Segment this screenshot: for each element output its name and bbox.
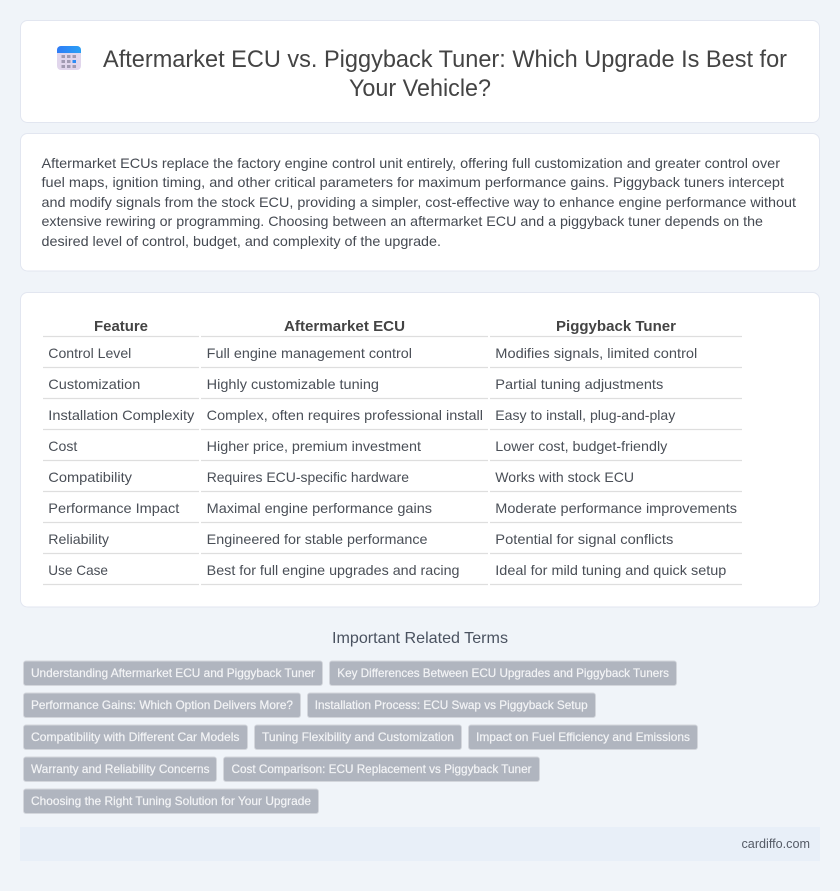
table row: performance impact [48, 500, 737, 516]
tag [468, 725, 698, 750]
icon: calendar grid [57, 46, 81, 70]
tag [224, 757, 540, 782]
table row: reliability: Engineered for stable performance [207, 531, 428, 547]
panel: introduction paragraph [20, 134, 820, 271]
tag: Compatibility with Different Car Models [31, 730, 240, 744]
footer bar [20, 827, 820, 861]
text block: introduction: Aftermarket ECUs replace the factory engine control unit entirely, offering full customization and greater control over [42, 155, 780, 171]
text block: introduction [42, 155, 796, 249]
table row: compatibility: Works with stock ECU [495, 469, 634, 485]
table header row: Piggyback Tuner [556, 318, 676, 335]
table row: customization: Highly customizable tuning [207, 376, 379, 392]
table row: use case: Best for full engine upgrades and racing [207, 562, 460, 578]
table row: reliability: Potential for signal conflicts [495, 531, 673, 547]
table row: cost: Cost [48, 438, 77, 454]
table row: compatibility: Requires ECU-specific hardware [207, 469, 409, 485]
title: Your Vehicle? [349, 75, 491, 102]
table row: compatibility: Compatibility [48, 469, 132, 485]
table row: installation complexity [48, 407, 675, 423]
table row: performance impact: Moderate performance improvements [495, 500, 737, 516]
table row: customization [48, 376, 663, 392]
tag: Key Differences Between ECU Upgrades and Piggyback Tuners [337, 666, 669, 680]
title: Aftermarket ECU vs. Piggyback Tuner: Which Upgrade Is Best for [103, 46, 787, 73]
tag: Warranty and Reliability Concerns [31, 762, 210, 776]
panel: related term tags [24, 661, 698, 814]
tag: Installation Process: ECU Swap vs Piggyback Setup [315, 698, 588, 712]
table header row: Aftermarket ECU [284, 318, 405, 335]
panel: comparison table [20, 292, 820, 607]
tag [24, 757, 216, 782]
table row: reliability: Reliability [48, 531, 109, 547]
table row: reliability [48, 531, 673, 547]
tag: Cost Comparison: ECU Replacement vs Piggyback Tuner [232, 762, 532, 776]
table row: control level: Modifies signals, limited control [495, 345, 697, 361]
table row: cost: Lower cost, budget-friendly [495, 438, 667, 454]
tag: Tuning Flexibility and Customization [262, 730, 454, 744]
tag [24, 789, 318, 814]
footer site name: cardiffo.com [742, 837, 810, 851]
tag [254, 725, 462, 750]
table row: control level [48, 345, 697, 361]
tag: Performance Gains: Which Option Delivers More? [31, 698, 293, 712]
table header row [94, 318, 676, 335]
table row: use case: Ideal for mild tuning and quick setup [495, 562, 727, 578]
table row: use case: Use Case [48, 562, 108, 578]
tag [24, 693, 300, 718]
tag: Impact on Fuel Efficiency and Emissions [476, 730, 690, 744]
heading: important related terms: Important Related Terms [332, 630, 508, 647]
table row: installation complexity: Installation Complexity [48, 407, 194, 423]
tag [308, 693, 596, 718]
text block: introduction: fuel maps, ignition timing, and other critical parameters for maximum performance gains. Piggyback tuners intercept [42, 174, 784, 190]
table row: performance impact: Maximal engine performance gains [207, 500, 432, 516]
table row: compatibility [48, 469, 634, 485]
tag [330, 661, 676, 686]
text block: introduction: extensive rewiring or programming. Choosing between an aftermarket ECU and a piggyback tuner depends on the [42, 213, 763, 229]
text block: introduction: and modify signals from the stock ECU, providing a simpler, cost-effective way to enhance engine performance without [42, 194, 796, 210]
table row: performance impact: Performance Impact [48, 500, 179, 516]
table row: customization: Partial tuning adjustments [495, 376, 663, 392]
text block: introduction: desired level of control, budget, and complexity of the upgrade. [42, 233, 441, 249]
table row: cost [48, 438, 667, 454]
table row: installation complexity: Complex, often requires professional install [207, 407, 483, 423]
table row: customization: Customization [48, 376, 140, 392]
table header row: Feature [94, 318, 148, 335]
tag [24, 661, 322, 686]
table row: use case [48, 562, 727, 578]
panel: title header [20, 20, 820, 122]
table row: control level: Control Level [48, 345, 131, 361]
tag: Understanding Aftermarket ECU and Piggyback Tuner [31, 666, 315, 680]
table row: control level: Full engine management control [207, 345, 412, 361]
title [103, 46, 787, 102]
tag [24, 725, 248, 750]
table row: cost: Higher price, premium investment [207, 438, 421, 454]
tag: Choosing the Right Tuning Solution for Your Upgrade [31, 794, 311, 808]
table row: installation complexity: Easy to install, plug-and-play [495, 407, 675, 423]
